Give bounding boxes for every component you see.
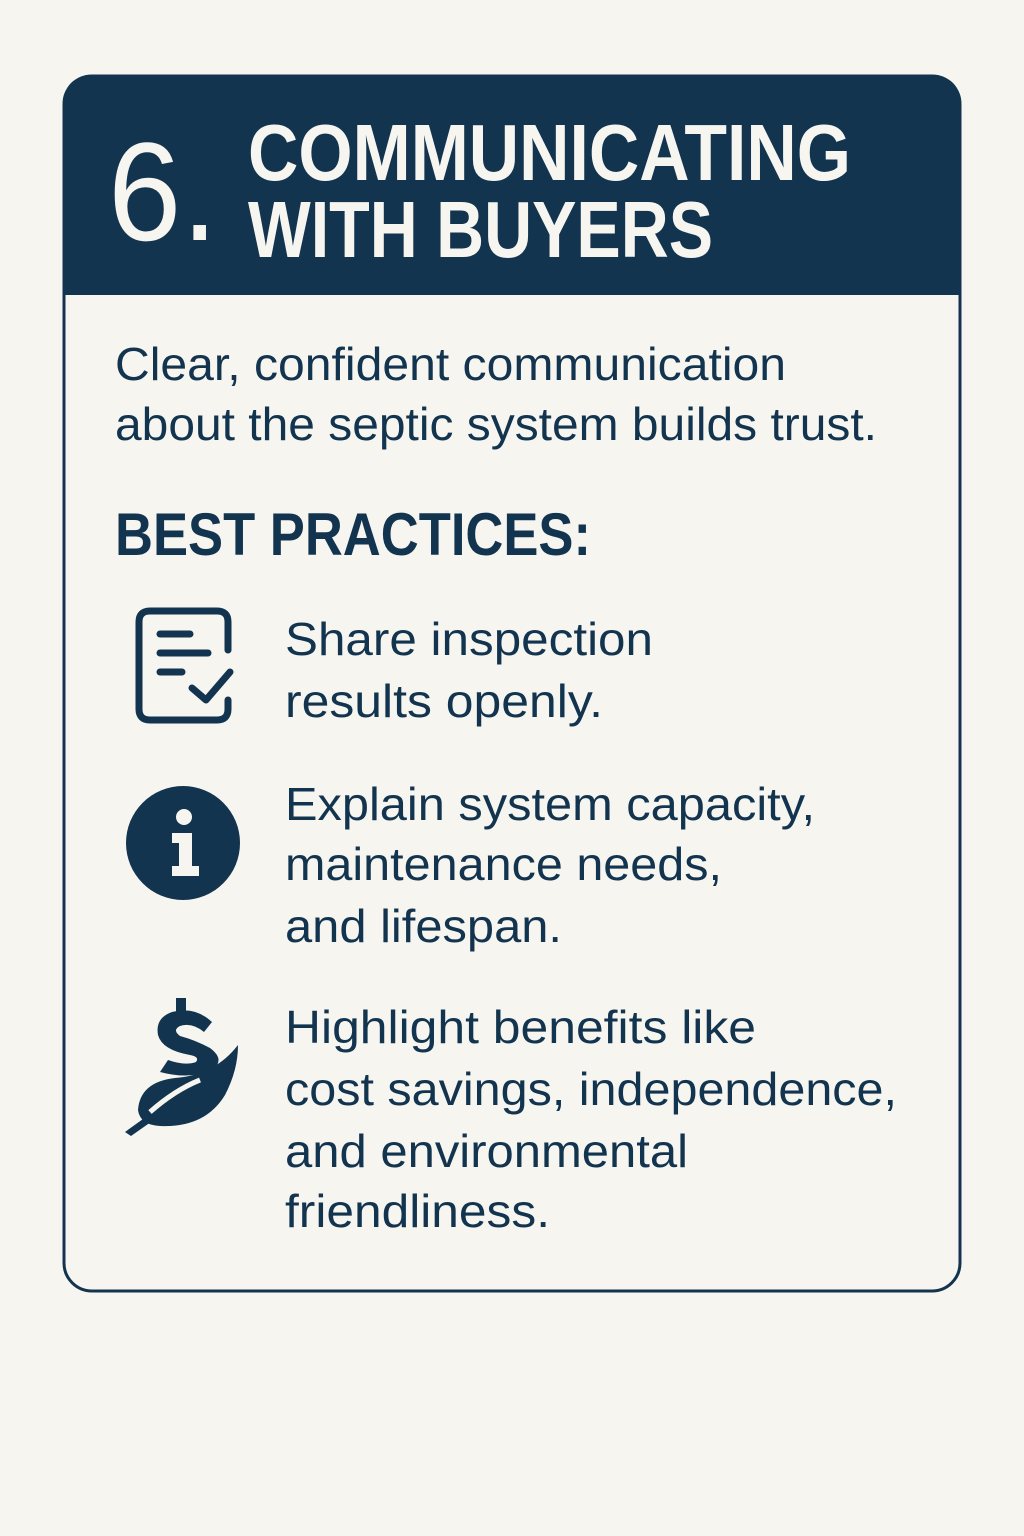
text 3: friendliness. <box>285 1185 550 1237</box>
icon: info circle <box>126 786 240 900</box>
text 2: and lifespan. <box>285 900 562 952</box>
icon: document check <box>139 611 230 720</box>
text 2 <box>285 778 815 952</box>
text 2: Explain system capacity, <box>285 778 815 830</box>
text 1: results openly. <box>285 675 603 727</box>
text 3: Highlight benefits like <box>285 1001 756 1053</box>
icon: dollar leaf <box>125 998 238 1136</box>
intro text: Clear, confident communication <box>115 338 786 390</box>
item 3 <box>125 998 897 1237</box>
heading title: COMMUNICATING <box>248 108 851 197</box>
header band <box>64 76 960 295</box>
card panel <box>64 76 960 1291</box>
heading title <box>248 108 851 274</box>
text 1: Share inspection <box>285 613 653 665</box>
text 3: cost savings, independence, <box>285 1063 897 1115</box>
intro text: about the septic system builds trust. <box>115 398 877 450</box>
text 3 <box>285 1001 897 1237</box>
text 1 <box>285 613 653 727</box>
heading title: WITH BUYERS <box>248 185 713 274</box>
heading number: 6. <box>108 113 218 270</box>
subheading: best practices: BEST PRACTICES: <box>115 501 591 568</box>
item 1 <box>139 611 653 727</box>
text 3: and environmental <box>285 1125 688 1177</box>
intro text <box>115 338 877 450</box>
text 2: maintenance needs, <box>285 838 722 890</box>
item 2 <box>126 778 815 952</box>
